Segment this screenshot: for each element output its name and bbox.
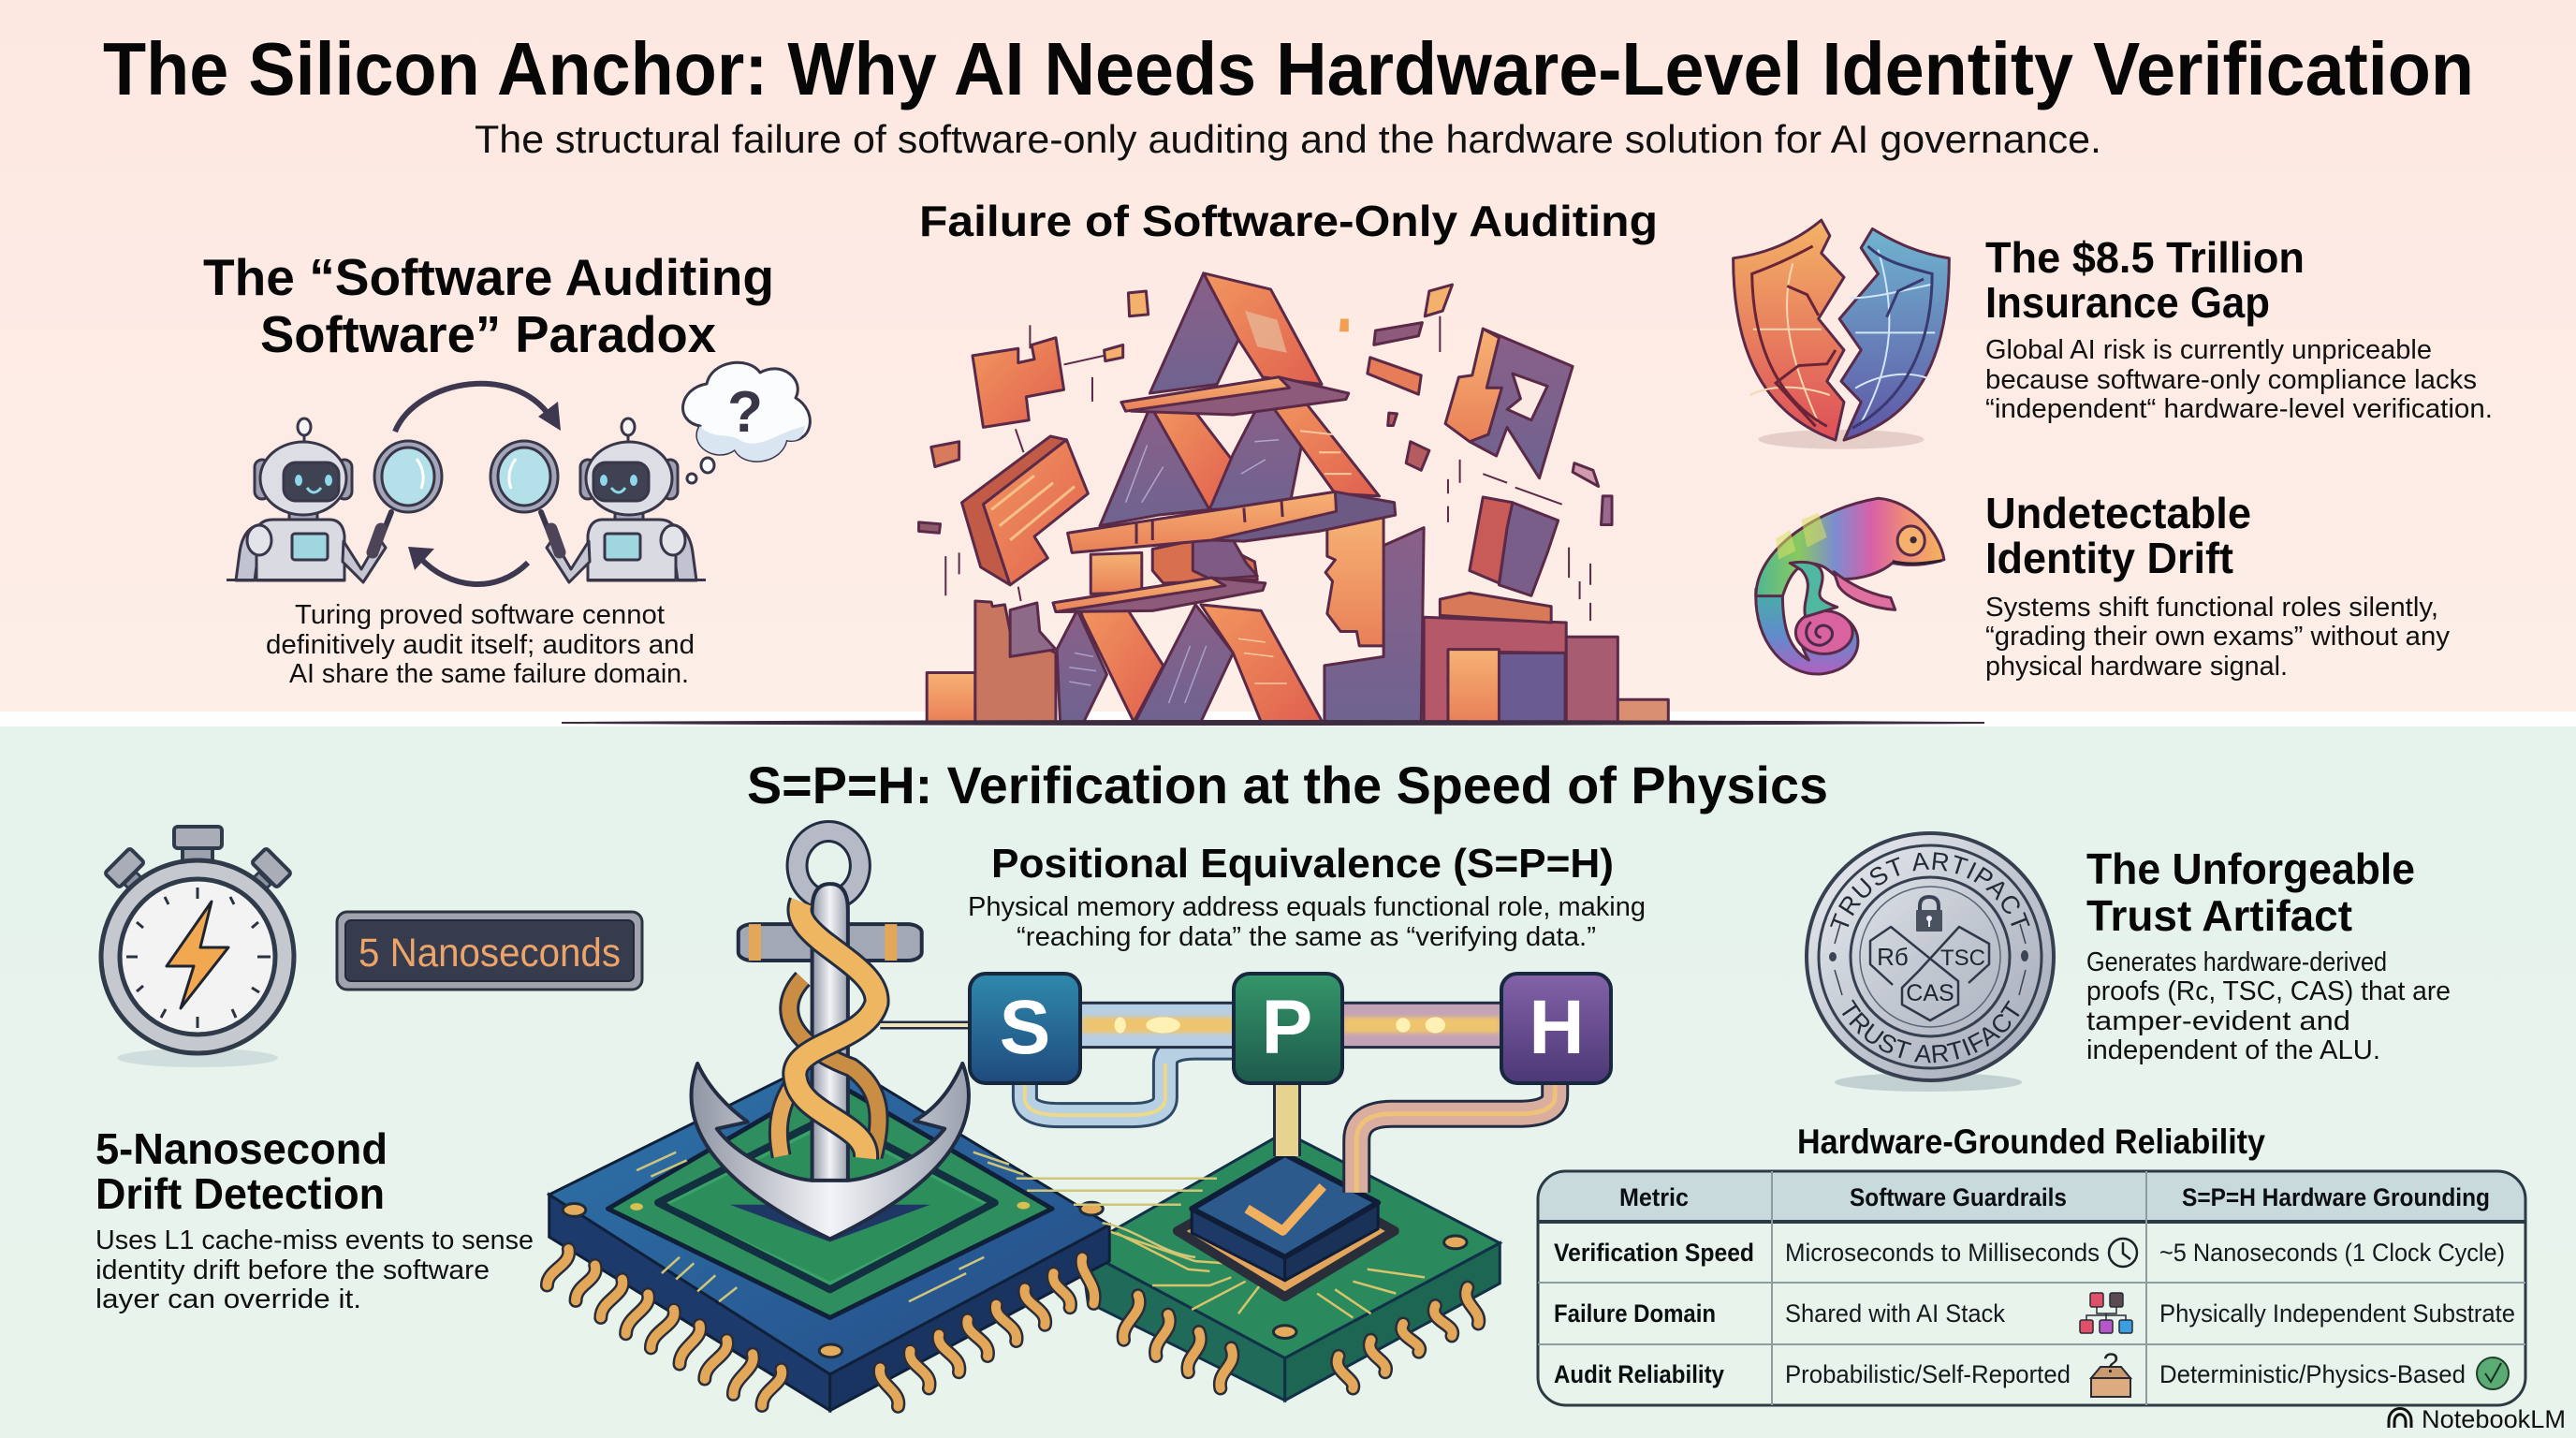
icon: right robot with magnifier <box>490 418 706 582</box>
text: trust artifact body <box>2086 947 2451 1065</box>
table header: S=P=H Hardware Grounding <box>2182 1183 2490 1211</box>
icon: thought cloud <box>683 362 810 483</box>
text: identity drift body: physical hardware signal. <box>1985 652 2288 682</box>
icon: chameleon <box>1756 498 1944 674</box>
table row: audit reliability: Deterministic/Physics-Based <box>2159 1360 2466 1388</box>
text: trust artifact body: proofs (Rc, TSC, CAS) that are <box>2086 976 2451 1006</box>
icon: trust artifact coin: TSC <box>1940 946 1985 971</box>
text: insurance gap body: because software-only compliance lacks <box>1985 365 2477 395</box>
table row: failure domain: Physically Independent Substrate <box>2159 1299 2515 1328</box>
illustration: anchored chips <box>547 831 1611 1411</box>
icon: cracked shield <box>1734 220 1949 449</box>
text: insurance gap body: “independent“ hardware-level verification. <box>1985 394 2493 424</box>
text: paradox body: Turing proved software cennot <box>295 600 665 630</box>
table header: Software Guardrails <box>1850 1183 2067 1211</box>
icon: clock <box>2109 1239 2137 1267</box>
heading: trust artifact: Trust Artifact <box>2086 891 2352 940</box>
heading: positional equivalence: Positional Equivalence (S=P=H) <box>991 841 1614 887</box>
text: insurance gap body <box>1985 335 2493 424</box>
icon: anchor <box>692 831 969 1239</box>
heading: paradox: Software” Paradox <box>260 305 716 363</box>
arrow: top loop <box>395 384 561 432</box>
text: paradox body: AI share the same failure domain. <box>289 659 689 689</box>
chip: verification chip <box>1081 1132 1500 1401</box>
heading: S=P=H verification: S=P=H: Verification at the Speed of Physics <box>747 756 1828 814</box>
heading: insurance gap: Insurance Gap <box>1985 278 2270 327</box>
icon: trust artifact coin <box>1805 831 2056 1092</box>
table row: audit reliability: Audit Reliability <box>1554 1360 1724 1388</box>
panel: insurance gap <box>1734 220 2493 449</box>
panel: solution background <box>0 726 2576 1438</box>
text: drift detection body: identity drift before the software <box>95 1255 490 1285</box>
icon: trust artifact coin: TRUST ARTIPACT <box>1830 852 2030 927</box>
text: identity drift body <box>1985 593 2451 682</box>
text: trust artifact body: tamper-evident and <box>2086 1006 2350 1036</box>
icon: left robot with magnifier <box>227 418 442 582</box>
text: drift detection body: Uses L1 cache-miss events to sense <box>95 1225 534 1255</box>
heading: drift detection <box>95 1124 388 1218</box>
icon: trust artifact coin: CAS <box>1906 980 1954 1006</box>
table row: audit reliability <box>1554 1360 2466 1388</box>
table: reliability comparison <box>1538 1171 2525 1405</box>
heading: failure of software-only auditing: Failure of Software-Only Auditing <box>919 197 1658 245</box>
text: trust artifact body: Generates hardware-derived <box>2086 947 2387 977</box>
table row: verification speed <box>1554 1239 2505 1267</box>
heading: paradox: The “Software Auditing <box>203 248 774 306</box>
table row: verification speed: Microseconds to Milliseconds <box>1785 1239 2100 1267</box>
table row: failure domain: Shared with AI Stack <box>1785 1299 2005 1328</box>
table row: audit reliability: Probabilistic/Self-Reported <box>1785 1360 2071 1388</box>
text: drift detection body <box>95 1225 534 1314</box>
icon: green check <box>2477 1357 2509 1389</box>
heading: identity drift: Identity Drift <box>1985 534 2233 582</box>
text: identity drift body: “grading their own exams” without any <box>1985 622 2451 652</box>
text: insurance gap body: Global AI risk is currently unpriceable <box>1985 335 2432 365</box>
heading: trust artifact: The Unforgeable <box>2086 844 2415 893</box>
heading: drift detection: Drift Detection <box>95 1169 385 1218</box>
table row: failure domain <box>1554 1299 2515 1328</box>
badge: 5 nanoseconds: 5 Nanoseconds <box>359 931 621 976</box>
text: trust artifact body: independent of the ALU. <box>2086 1035 2380 1065</box>
heading: insurance gap <box>1985 233 2305 327</box>
heading: identity drift <box>1985 489 2251 582</box>
table row: verification speed: ~5 Nanoseconds (1 Clock Cycle) <box>2159 1239 2505 1267</box>
icon: trust artifact coin: Rб <box>1877 943 1909 971</box>
text: identity drift body: Systems shift functional roles silently, <box>1985 593 2438 623</box>
panel: 5-nanosecond drift detection <box>95 827 642 1314</box>
panel: unforgeable trust artifact <box>1805 831 2451 1092</box>
node: S <box>970 974 1080 1083</box>
badge: 5 nanoseconds <box>337 912 642 990</box>
icon: shared stack hierarchy <box>2080 1293 2132 1333</box>
icon: stopwatch <box>101 827 294 1067</box>
table header <box>1619 1183 2490 1211</box>
node: S: S <box>1000 985 1050 1070</box>
panel: positional equivalence <box>968 841 1646 952</box>
heading: hardware-grounded reliability: Hardware-Grounded Reliability <box>1797 1123 2265 1161</box>
text: paradox body: definitively audit itself; auditors and <box>266 630 695 660</box>
table header: Metric <box>1619 1183 1689 1211</box>
heading: trust artifact <box>2086 844 2415 940</box>
panel: software auditing paradox <box>203 248 810 689</box>
node: P <box>1234 974 1342 1083</box>
title: The Silicon Anchor: Why AI Needs Hardware-Level Identity Verification <box>103 27 2474 110</box>
heading: identity drift: Undetectable <box>1985 489 2251 537</box>
panel: white divider band <box>0 712 2576 726</box>
floor line <box>562 721 1984 725</box>
text: drift detection body: layer can override it. <box>95 1284 361 1314</box>
icon: trust artifact coin: TRUST ARTIFACT <box>1842 1000 2020 1064</box>
text: positional equivalence body <box>968 892 1646 952</box>
connector: S=P=H bus <box>880 1003 1555 1193</box>
icon: thought cloud: ? <box>727 380 763 445</box>
arrow: bottom loop <box>408 547 528 584</box>
panel: identity drift <box>1756 489 2451 682</box>
icon: black box question: ? <box>2103 1348 2118 1379</box>
logo: NotebookLM: NotebookLM <box>2422 1405 2566 1433</box>
heading: drift detection: 5-Nanosecond <box>95 1124 388 1173</box>
text: positional equivalence body: Physical memory address equals functional role, making <box>968 892 1646 922</box>
table row: failure domain: Failure Domain <box>1554 1299 1716 1328</box>
subtitle: The structural failure of software-only auditing and the hardware solution for AI governance. <box>475 117 2101 161</box>
heading: insurance gap: The $8.5 Trillion <box>1985 233 2305 282</box>
heading: paradox <box>203 248 774 363</box>
text: paradox body <box>266 600 695 689</box>
panel: problem background <box>0 0 2576 712</box>
chip: anchor base chip <box>547 1055 1217 1411</box>
table row: verification speed: Verification Speed <box>1554 1239 1754 1267</box>
node: H <box>1501 974 1611 1083</box>
icon: black box question <box>2091 1348 2130 1397</box>
illustration: collapsing house of cards <box>919 273 1668 722</box>
node: H: H <box>1529 985 1585 1070</box>
text: positional equivalence body: “reaching for data” the same as “verifying data.” <box>1017 922 1596 952</box>
node: P: P <box>1262 985 1312 1070</box>
